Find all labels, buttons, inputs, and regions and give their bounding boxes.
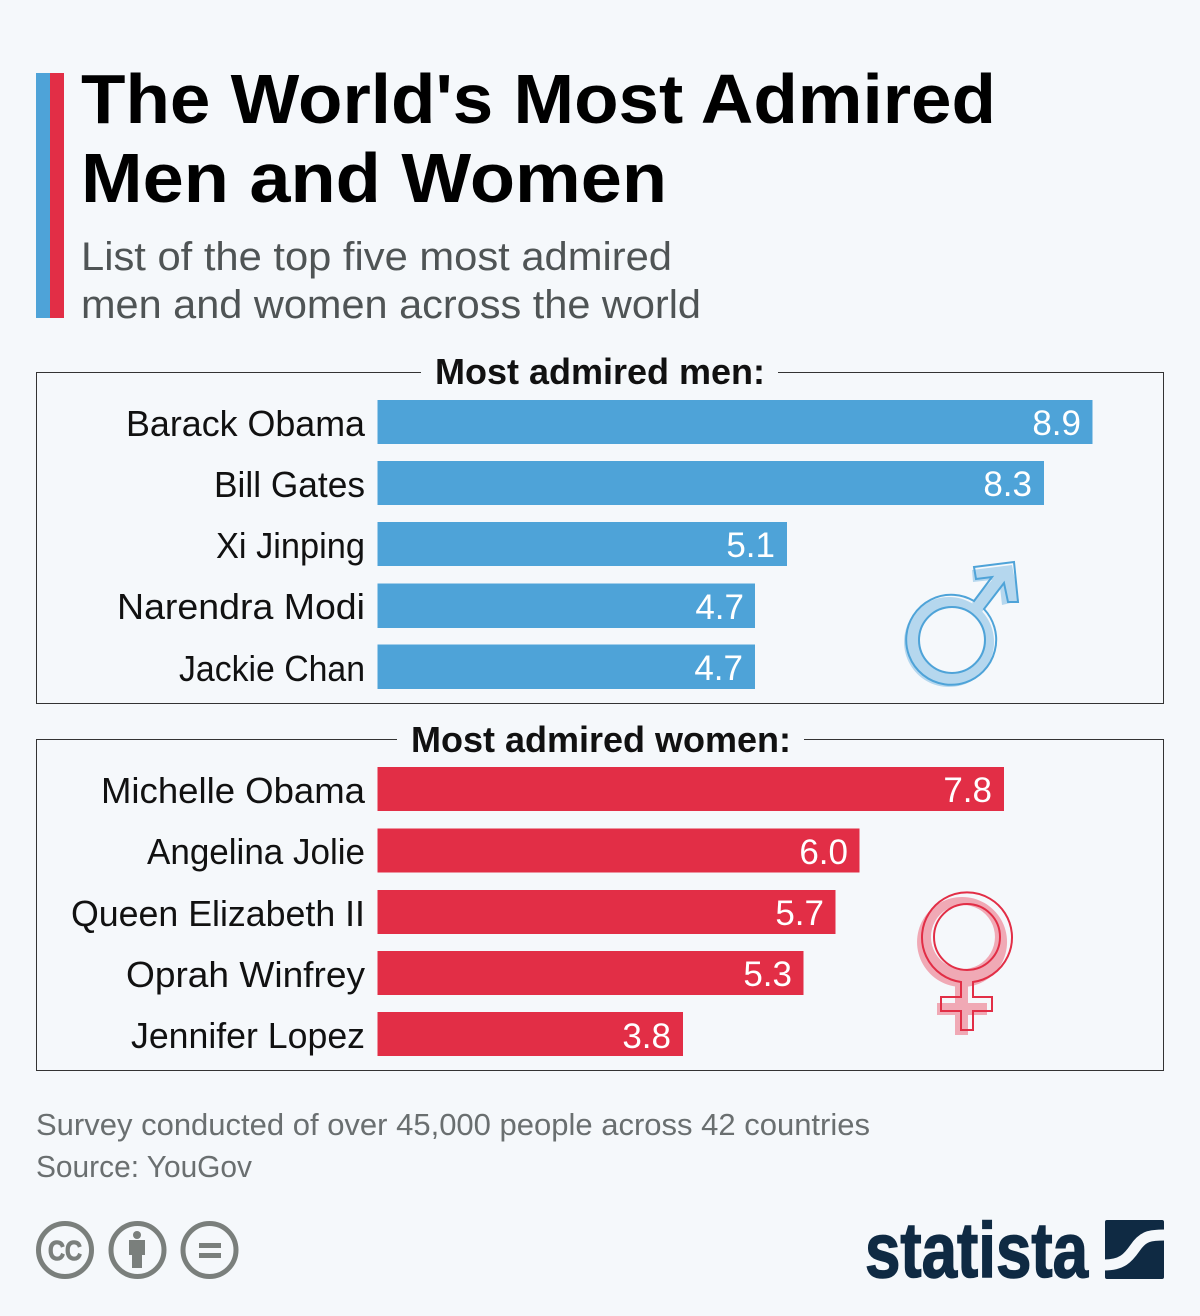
footnote (36, 1107, 870, 1184)
row: Narendra Modi (117, 584, 755, 628)
icon: attribution (111, 1224, 164, 1276)
heading: most admired men: Most admired men: (435, 351, 765, 392)
title (81, 60, 996, 217)
row: Bill Gates (214, 461, 1044, 505)
row: Jackie Chan (179, 644, 755, 689)
row: Jennifer Lopez: 3.8 (622, 1017, 671, 1056)
row: Queen Elizabeth II (71, 890, 836, 934)
row: Michelle Obama: 7.8 (943, 771, 992, 810)
panel: most admired men (36, 351, 1164, 704)
title: The World's Most Admired (81, 60, 996, 138)
row: Xi Jinping (216, 522, 787, 566)
row: Angelina Jolie: 6.0 (799, 833, 848, 872)
icon: creative commons (38, 1224, 92, 1276)
row: Oprah Winfrey: 5.3 (743, 955, 792, 994)
subtitle: List of the top five most admired (81, 235, 672, 279)
row: Bill Gates: 8.3 (983, 465, 1032, 504)
row: Barack Obama (126, 400, 1092, 444)
icon: female symbol (917, 892, 1012, 1035)
footnote: Survey conducted of over 45,000 people across 42 countries (36, 1107, 870, 1142)
icon: creative commons: CC (48, 1235, 82, 1266)
row: Queen Elizabeth II: 5.7 (775, 894, 824, 933)
row: Oprah Winfrey: Oprah Winfrey (126, 954, 365, 995)
icon: male symbol (904, 562, 1019, 687)
heading: most admired women: Most admired women: (411, 719, 791, 760)
row: Oprah Winfrey (126, 951, 804, 995)
row: Jennifer Lopez (131, 1012, 683, 1056)
row: Angelina Jolie (147, 828, 860, 872)
row: Queen Elizabeth II: Queen Elizabeth II (71, 893, 365, 934)
title: Men and Women (81, 139, 667, 217)
row: Angelina Jolie: Angelina Jolie (147, 831, 365, 872)
row: Narendra Modi: Narendra Modi (117, 586, 365, 627)
row: Narendra Modi: 4.7 (695, 588, 744, 627)
row: Michelle Obama (101, 767, 1004, 811)
panel: most admired women (36, 719, 1164, 1070)
row: Michelle Obama: Michelle Obama (101, 770, 366, 811)
row: Jackie Chan: Jackie Chan (179, 648, 365, 689)
row: Barack Obama: Barack Obama (126, 403, 366, 444)
row: Barack Obama: 8.9 (1032, 404, 1081, 443)
footnote: Source: YouGov (36, 1149, 252, 1184)
subtitle: men and women across the world (81, 283, 701, 327)
row: Bill Gates: Bill Gates (214, 464, 365, 505)
statista wordmark: statista (865, 1206, 1088, 1294)
subtitle (81, 235, 701, 327)
icon: no derivatives (183, 1224, 236, 1276)
row: Jackie Chan: 4.7 (694, 649, 743, 688)
row: Xi Jinping: 5.1 (726, 526, 775, 565)
accent bar (36, 73, 64, 318)
statista logo mark (1104, 1220, 1165, 1279)
row: Xi Jinping: Xi Jinping (216, 525, 365, 566)
row: Jennifer Lopez: Jennifer Lopez (131, 1015, 365, 1056)
